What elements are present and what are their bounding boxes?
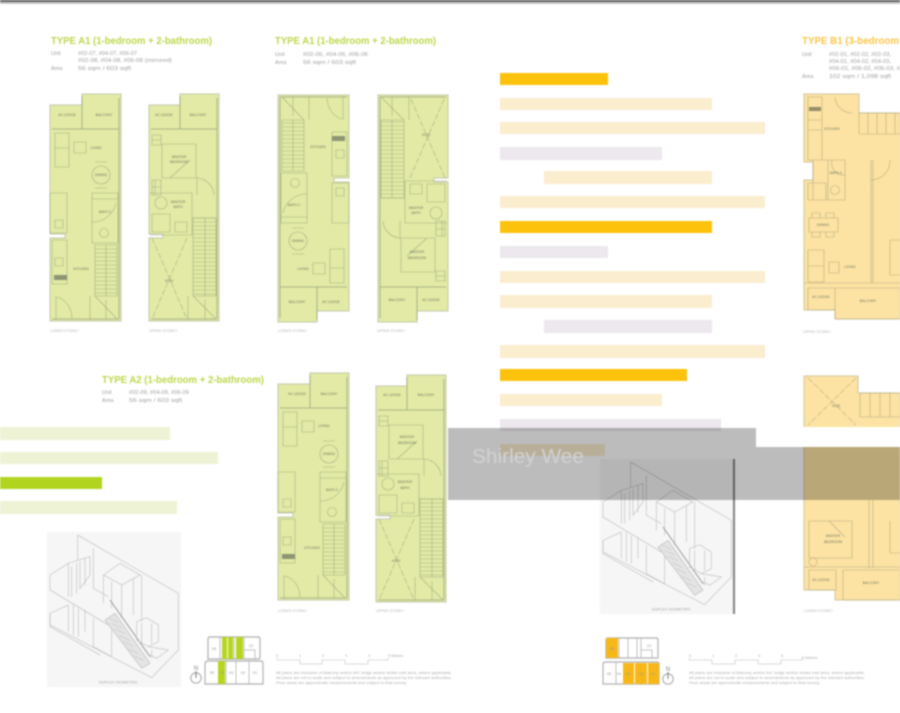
floor plan: type A2 lower storey: DINING [323,452,335,456]
heading block: type A2: 56 sqm / 603 sqft [129,398,183,404]
floor plan: type B1 upper storey: LIVING [844,265,856,269]
floor plan: type A2 lower storey [278,373,349,613]
scale bar right: 5 Metres [802,655,817,660]
isometric drawing: type A [47,532,181,687]
heading block: type B1: Unit [802,52,812,58]
floor plan: type A2 upper storey: BEDROOM [398,441,416,445]
key plan: type A: 04 [220,670,225,675]
floor plan: type B1 lower storey: LOWER STOREY [804,609,833,613]
heading block: type A1 right: Unit [275,52,285,58]
floor plan: type A1 left lower storey: AC LEDGE [58,113,77,117]
floor plan: type B1 upper storey: KITCHEN [824,127,840,131]
heading block: type A1 right: 56 sqm / 603 sqft [303,60,357,66]
heading block: type A1 left: 56 sqm / 603 sqft [78,66,132,72]
floor plan: type A1 right lower storey: LIVING [297,267,309,271]
floor plan: type B1 lower storey: BEDROOM [824,540,842,544]
key plan: type A: 03 [229,670,234,675]
floor plan: type A1 right upper storey: BATH [411,211,421,215]
floor plan: type A1 right lower storey: BATH 2 [288,203,300,207]
floor plan: type A1 left upper storey: BATH [173,205,183,209]
floor plan: type A1 left lower storey: DINING [95,173,107,177]
redaction bars: left column [0,427,218,514]
floor plan: type A2 upper storey: BATH [400,486,410,490]
scale bar left: 1 [299,653,301,658]
floor plan: type A2 upper storey: UPPER STOREY [376,609,405,613]
floor plan: type A2 lower storey: LOWER STOREY [278,609,307,613]
floor plan: type A1 right upper storey: MASTER [409,206,424,210]
watermark text: Shirley Wee [472,446,584,468]
floor plan: type A1 right upper storey: VOID [422,133,431,137]
floor plan: type A1 right upper storey: MASTER [410,250,425,254]
floor plan: type A1 left upper storey: MASTER [172,155,187,159]
key plan: type B: 03 [626,671,631,676]
footnote left: All plans are inclusive of Balcony and/or A/C ledge and/or strata void area, where applicable. [276,670,452,675]
floor plan: type A1 right lower storey: DINING [292,239,304,243]
footnote right: All plans are not to scale and subject to amendments as approved by the relevant authorities. [689,675,865,680]
heading block: type A1 left: #02-08, #04-08, #06-08 (mirrored) [78,58,172,64]
key plan: type B: 02 [639,671,644,676]
icon: north compass left [191,666,201,683]
floor plan: type B1 upper storey [803,94,900,334]
key plan: type A: 05 [210,670,215,675]
floor plan: type A2 upper storey: VOID [392,559,401,563]
heading block: type B1: 102 sqm / 1,098 sqft [829,74,892,80]
heading block: type A1 left [51,36,212,72]
footnote left: All plans are not to scale and subject to amendments as approved by the relevant authorities. [276,675,452,680]
floor plan: type A2 upper storey: MASTER [400,435,415,439]
heading block: type B1 [802,36,900,80]
heading block: type A2: #02-09, #04-09, #06-09 [129,390,189,396]
footnote left: Floor areas are approximate measurements and subject to final survey. [276,680,407,685]
floor plan: type A1 left upper storey: BEDROOM [170,160,188,164]
heading block: type B1: #06-01, #06-02, #06-03, # [829,66,900,72]
floor plan: type A1 left lower storey: LIVING [90,146,102,150]
key plan: type A [205,637,263,684]
floor plan: type A2 lower storey: AC LEDGE [288,392,307,396]
floor plan: type A1 right upper storey [377,95,448,333]
vertical rule beside isometric [733,459,735,614]
floor plan: type A1 left upper storey: BALCONY [190,113,207,117]
floor plan: type A2 upper storey [376,375,446,613]
heading block: type A2: Unit [102,390,112,396]
heading block: type A1 right: Area [275,60,286,66]
heading block: type B1: Area [802,74,813,80]
key plan: type B [603,638,659,684]
scale bar left: 2 [322,653,324,658]
footnote right: Floor areas are approximate measurements and subject to final survey. [689,680,820,685]
floor plan: type A1 left lower storey: LOWER STOREY [50,329,79,333]
floor plan: type A1 right lower storey: LOWER STOREY [278,329,307,333]
scale bar right: 4 [781,653,784,658]
scale bar right: 2 [735,653,737,658]
floor plan: type A1 right lower storey: BALCONY [289,300,306,304]
floor plan: type A2 upper storey: AC LEDGE [383,393,402,397]
floor plan: type A1 right lower storey: AC LEDGE [322,300,341,304]
icon: north compass right [663,667,673,684]
watermark band [448,428,900,500]
scale bar right [689,653,817,664]
floor plan: type B1 lower storey: MASTER [826,534,841,538]
floor plan: type A1 right upper storey: AC LEDGE [422,298,441,302]
floor plan: type B1 lower storey: BALCONY [863,581,880,585]
floor plan: type A2 lower storey: BALCONY [321,392,338,396]
floor plan: type A1 right upper storey: BALCONY [389,298,406,302]
floor plan: type B1 lower storey [804,376,900,613]
floor plan: type A1 right lower storey: KITCHEN [310,145,326,149]
redaction bars: centre column [500,73,765,456]
floor plan: type B1 upper storey: DINING [817,223,829,227]
scale bar left: 0 [276,653,279,658]
heading block: type A1 left: Area [51,66,62,72]
scale bar left: 5 Metres [388,653,403,658]
key plan: type B: 06 [610,646,615,651]
floor plan: type A1 left upper storey [149,94,219,333]
floor plan: type A1 left lower storey: KITCHEN [73,267,89,271]
isometric drawing: type B [600,459,734,614]
floor plan: type A1 right upper storey: BEDROOM [408,256,426,260]
footnote right: All plans are inclusive of Balcony and/or A/C ledge and/or strata void area, where applicable. [689,670,865,675]
floor plan: type A1 left upper storey: UPPER STOREY [149,329,178,333]
floor plan: type A2 lower storey: KITCHEN [304,546,320,550]
floor plan: type B1 upper storey: UPPER STOREY [803,330,832,334]
heading block: type B1: #02-01, #02-02, #02-03, [829,52,892,58]
floor plan: type B1 upper storey: BALCONY [860,299,877,303]
floor plan: type A1 left upper storey: VOID [165,279,174,283]
floor plan: type B1 upper storey: BATH 4 [830,171,842,175]
heading block: type A1 left: Unit [51,51,61,57]
heading block: type A2 [102,375,264,404]
heading block: type A2: TYPE A2 (1-bedroom + 2-bathroom) [102,375,264,386]
floor plan: type A2 lower storey: BATH 2 [326,488,338,492]
floor plan: type A1 right upper storey: UPPER STOREY [377,329,406,333]
white patch over band [756,427,900,447]
floor plan: type A1 right lower storey [278,95,349,333]
heading block: type A1 right: TYPE A1 (1-bedroom + 2-bathroom) [275,36,436,47]
scale bar left: 3 [345,653,347,658]
floor plan: type A1 left lower storey [50,94,121,333]
top edge strip [0,0,900,4]
heading block: type B1: #04-01, #04-02, #04-03, [829,59,892,65]
heading block: type A1 left: TYPE A1 (1-bedroom + 2-bathroom) [51,36,212,47]
floor plan: type A1 left upper storey: AC LEDGE [155,113,174,117]
key plan: type B: 05 [607,671,612,676]
key plan: type B: 04 [617,671,622,676]
floor plan: type A1 left lower storey: BATH 2 [99,210,111,214]
key plan: type A: 06 [212,646,217,651]
heading block: type A1 left: #02-07, #04-07, #06-07 [78,51,137,57]
floor plan: type A2 upper storey: BALCONY [418,393,435,397]
heading block: type A2: Area [102,398,113,404]
floor plan: type A2 upper storey: MASTER [398,480,413,484]
floor plan: type A1 left upper storey: MASTER [171,200,186,204]
scale bar right: 3 [758,653,760,658]
floor plan: type A2 lower storey: LIVING [318,424,330,428]
scale bar right: 0 [689,653,692,658]
floor plan: type B1 upper storey: AC LEDGE [812,295,831,299]
key plan: type B: 01 [651,671,656,676]
icon: north compass right: N [666,667,670,673]
scale bar right: 1 [712,653,714,658]
key plan: type A: 10 [249,643,254,648]
icon: north compass left: N [194,666,198,672]
key plan: type B: 10 [647,643,652,648]
heading block: type A1 right: #02-06, #04-06, #06-06 [303,52,368,58]
floor plan: type B1 lower storey: AC LEDGE [812,578,831,582]
footnote left [276,670,452,685]
footnote right [689,670,865,685]
heading block: type A1 right [275,36,436,66]
scale bar left: 4 [368,653,371,658]
key plan: type A: 02 [241,670,246,675]
scale bar left [276,653,403,664]
floor plan: type B1 lower storey: VOID [832,404,841,408]
floor plan: type A1 left lower storey: BALCONY [96,113,113,117]
key plan: type A: 01 [253,670,258,675]
